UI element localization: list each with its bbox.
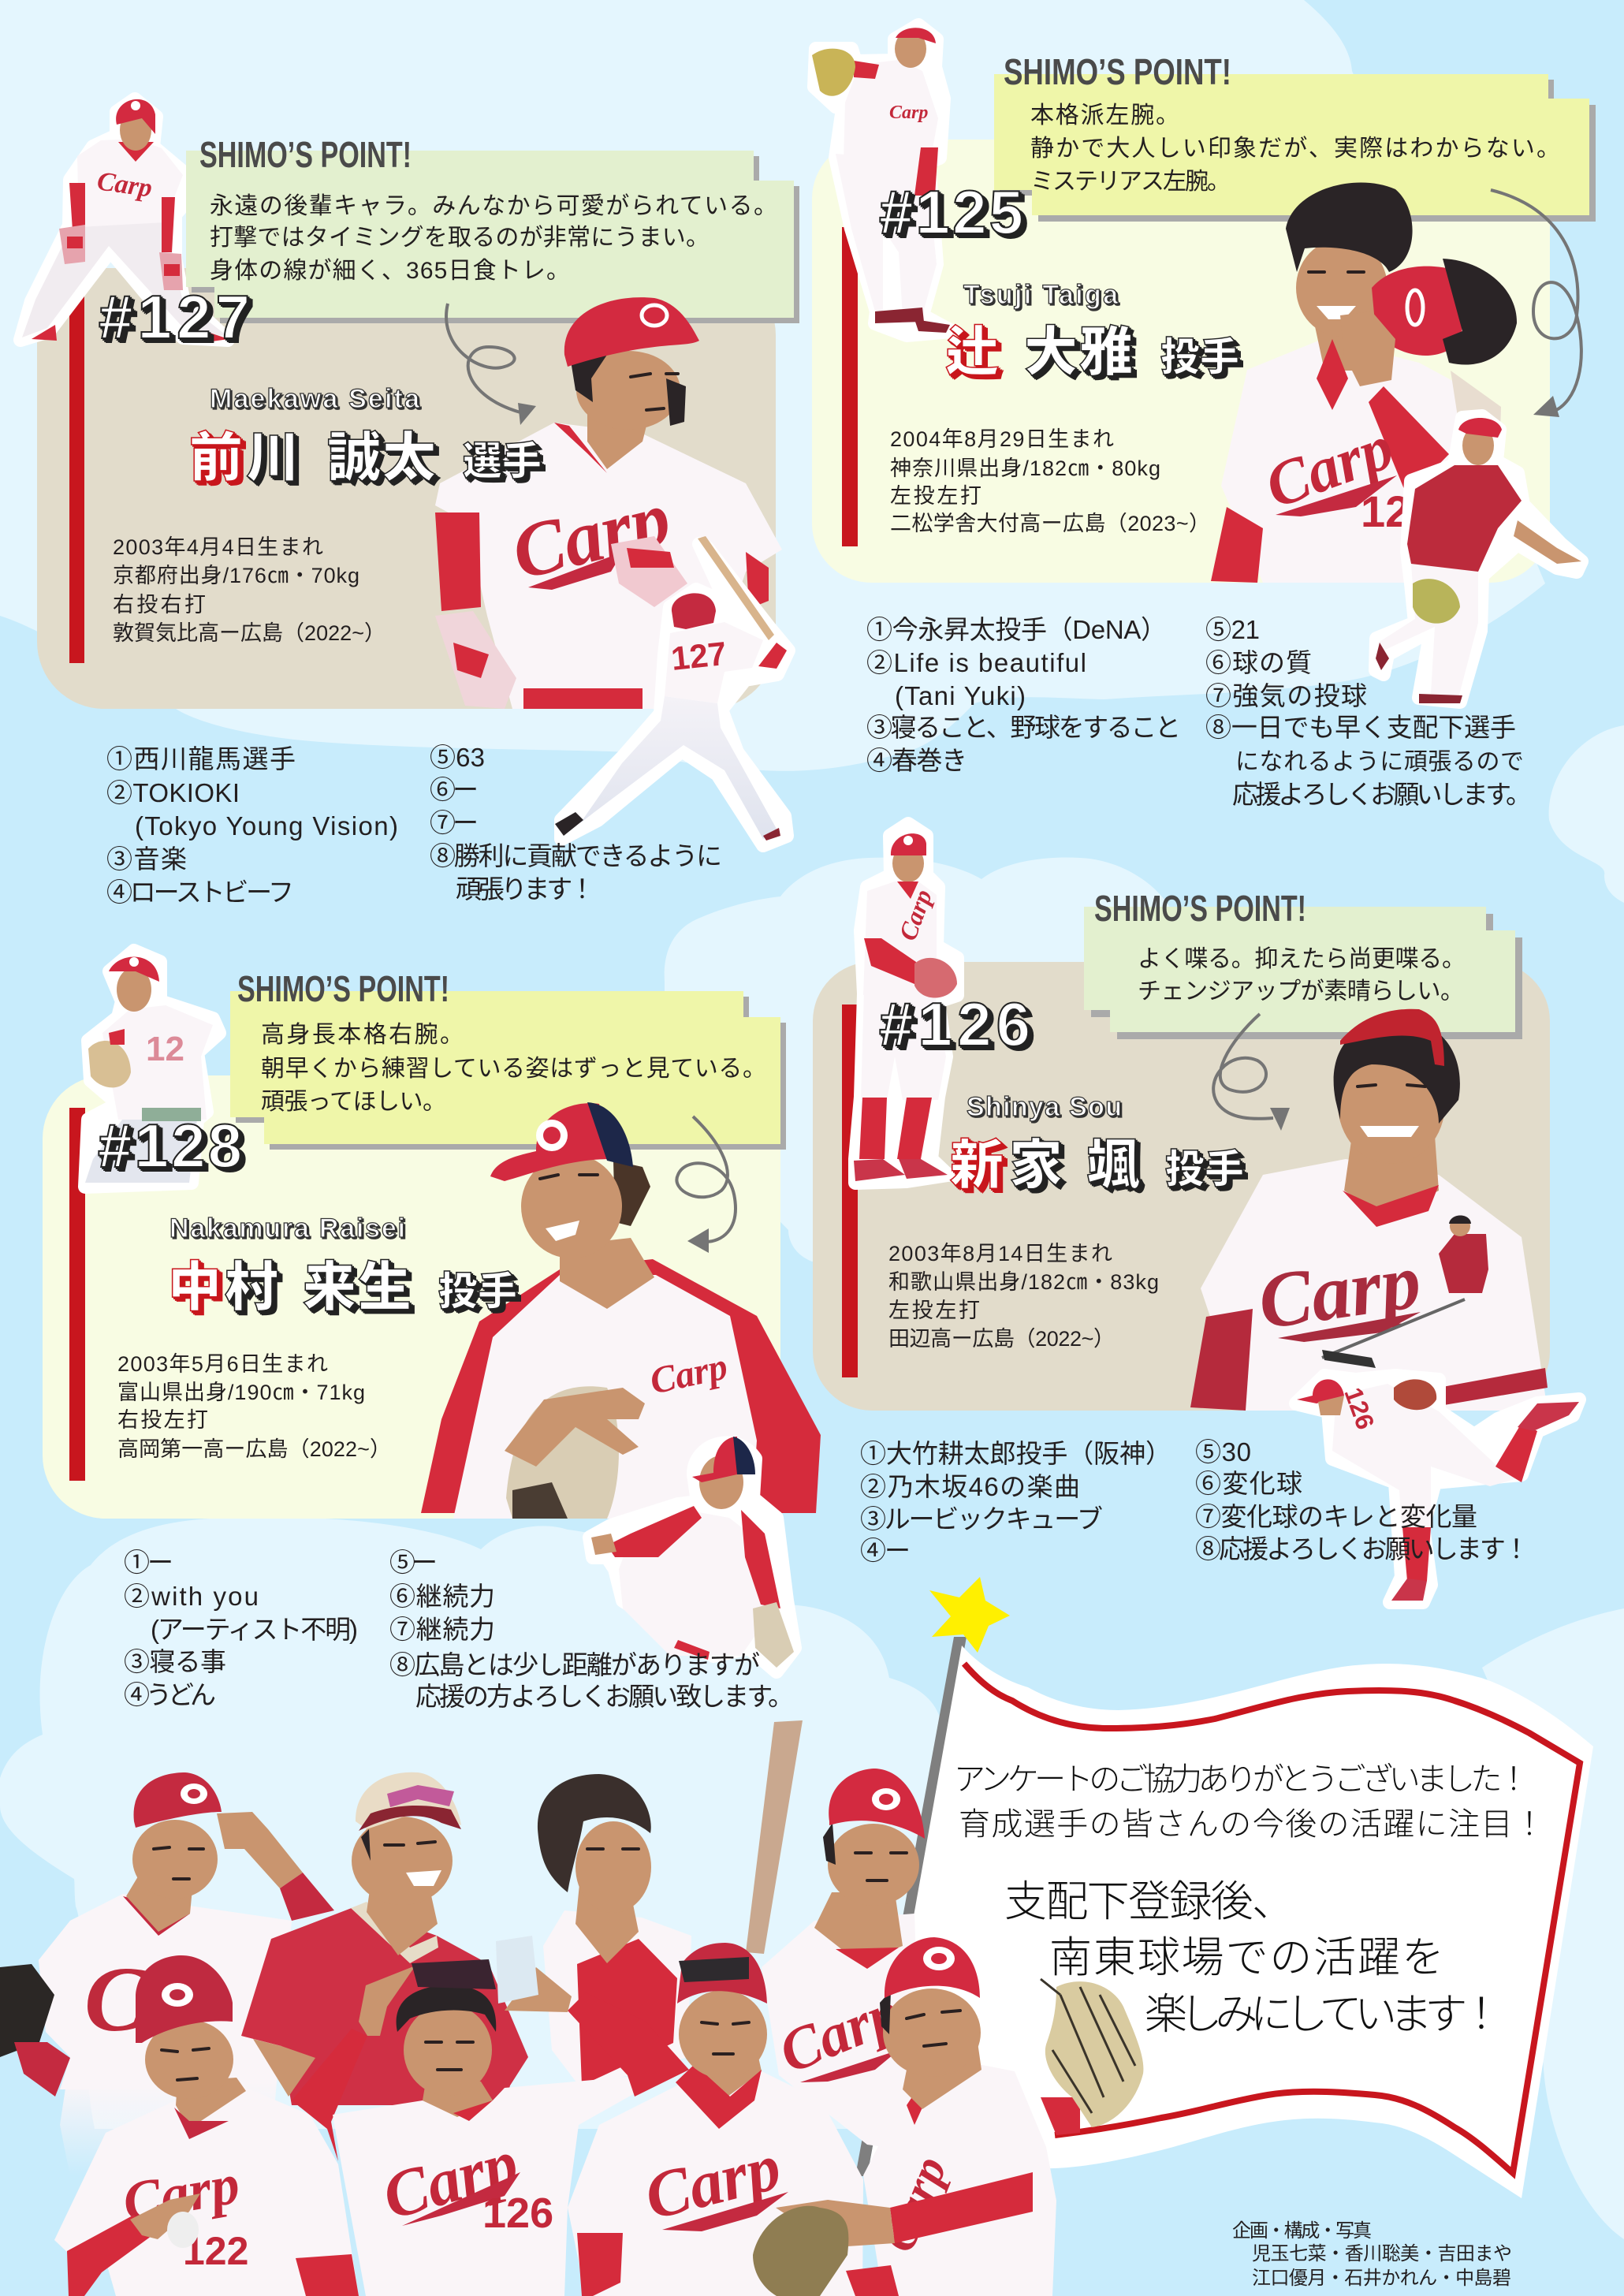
photo: pitching follow-through sticker (1296, 1376, 1579, 1602)
player back row 4 (762, 1769, 925, 2152)
romanized name: Tsuji Taiga (963, 280, 1119, 310)
player front row 3: Carp (638, 2130, 788, 2234)
profile card (812, 140, 1550, 583)
questionnaire answers left: ④春巻き (866, 746, 967, 775)
questionnaire answers right (1195, 1437, 1529, 1564)
note heading: SHIMO’S POINT! (1094, 888, 1306, 929)
questionnaire answers left: ②with you (124, 1582, 259, 1611)
questionnaire answers left: ④ローストビーフ (106, 878, 294, 907)
panel: player 128 Nakamura Raisei (43, 951, 821, 1711)
curly arrow (1213, 1014, 1290, 1131)
questionnaire answers left: ①ー (124, 1548, 173, 1577)
questionnaire answers right: ⑦強気の投球 (1205, 681, 1367, 710)
photo: pitching follow-through sticker: 126 (1339, 1384, 1380, 1433)
kanji name: 投手 (438, 1269, 517, 1314)
questionnaire answers left: (Tani Yuki) (895, 681, 1026, 710)
player back row 1: C (84, 1948, 147, 2051)
questionnaire answers right: ⑦継続力 (389, 1615, 495, 1644)
profile text: 二松学舎大付高ー広島（2023~） (890, 512, 1210, 535)
photo: large smiling portrait (1190, 1009, 1548, 1411)
flag message: 楽しみにしています！ (1145, 1991, 1503, 2038)
kanji name (168, 1258, 517, 1318)
photo: large portrait holding cap (1211, 182, 1517, 583)
questionnaire answers left: ③寝る事 (124, 1647, 226, 1676)
credits: 企画・構成・写真 (1232, 2220, 1372, 2242)
questionnaire answers left: (アーティスト不明) (151, 1615, 358, 1644)
questionnaire answers right: ⑤21 (1205, 615, 1260, 644)
kanji name: 新 (950, 1135, 1004, 1195)
profile text (117, 1352, 391, 1461)
red accent bar (842, 1004, 858, 1377)
photo: large portrait in helmet: Carp (504, 475, 679, 596)
profile text: 右投右打 (113, 593, 206, 617)
photo: full-body pitcher sticker: Carp (889, 102, 928, 123)
player back row 4: Carp (770, 1978, 909, 2086)
jersey number: #127 (99, 282, 250, 352)
questionnaire answers left: ④ー (860, 1536, 911, 1565)
questionnaire answers right: ⑧一日でも早く支配下選手 (1205, 713, 1516, 742)
panel: player 127 Maekawa Seita (20, 99, 799, 907)
romanized name: Shinya Sou (967, 1092, 1122, 1122)
note text: ミステリアス左腕。 (1030, 169, 1231, 195)
kanji name: 投手 (1165, 1147, 1244, 1191)
kanji name: 投手 (1160, 335, 1239, 379)
photo: groundskeeping small figure (1322, 1216, 1488, 1368)
questionnaire answers left (124, 1548, 358, 1709)
kanji name: 中 (168, 1258, 222, 1318)
romanized name: Nakamura Raisei (169, 1213, 405, 1243)
photo: running sticker in red shirt (1376, 416, 1581, 703)
red accent bar (69, 1108, 85, 1481)
questionnaire answers right: ⑥ー (430, 775, 479, 804)
profile card (43, 1075, 780, 1519)
questionnaire answers right: ⑧応援よろしくお願いします！ (1195, 1534, 1529, 1564)
profile text: 2003年8月14日生まれ (888, 1242, 1112, 1265)
kanji name: 前 (189, 428, 243, 488)
photo: large smiling portrait: Carp (1253, 1236, 1426, 1346)
questionnaire answers left: ④うどん (124, 1680, 216, 1709)
questionnaire answers right: ⑦変化球のキレと変化量 (1195, 1502, 1477, 1531)
kanji name (189, 428, 542, 488)
curly arrow (1491, 190, 1581, 417)
note text (1030, 102, 1560, 195)
photo: large portrait in helmet (435, 297, 782, 709)
player back row 2 in red shirt (241, 1772, 528, 2105)
note text (210, 193, 777, 284)
flag message: 支配下登録後、 (1004, 1878, 1294, 1925)
kanji name: 来生 (303, 1258, 412, 1318)
questionnaire answers left: ①今永昇太投手（DeNA） (866, 615, 1167, 644)
credits (1232, 2220, 1512, 2289)
player front row 2 with water bottle: 126 (482, 2190, 553, 2237)
profile card (37, 268, 776, 709)
note heading: SHIMO’S POINT! (199, 134, 412, 175)
questionnaire answers right: ⑥継続力 (389, 1582, 495, 1611)
jersey number: #128 (98, 1111, 242, 1180)
kanji name: 家 (1009, 1135, 1063, 1195)
player front row 1 (54, 1955, 359, 2296)
note text (1138, 946, 1466, 1004)
profile text: 左投左打 (890, 484, 981, 508)
questionnaire answers right: ⑤30 (1195, 1437, 1251, 1467)
questionnaire answers right: になれるように頑張るので (1235, 749, 1524, 775)
kanji name (945, 322, 1239, 382)
profile text: 右投左打 (117, 1408, 208, 1432)
questionnaire answers right (430, 743, 722, 904)
photo: throwing sticker: 12 (146, 1030, 184, 1068)
profile card (813, 962, 1550, 1411)
note text: 身体の線が細く、365日食トレ。 (210, 258, 570, 284)
note heading: SHIMO’S POINT! (237, 968, 449, 1009)
credits: 児玉七菜・香川聡美・吉田まや (1252, 2243, 1512, 2264)
questionnaire answers right: 頑張ります！ (456, 874, 595, 904)
questionnaire answers left (106, 744, 398, 907)
photo: throwing sticker (85, 951, 219, 1187)
questionnaire answers left: ③寝ること、野球をすること (866, 713, 1181, 742)
icon: baseball glove (1041, 1979, 1143, 2135)
player front row 3 (568, 1943, 863, 2296)
photo: large portrait holding cap: 125 (1361, 486, 1434, 536)
flag message (954, 1762, 1545, 2038)
profile text: 神奈川県出身/182㎝・80kg (890, 457, 1160, 480)
player front row 4 with glove (753, 1937, 1056, 2296)
panel: player 126 Shinya Sou (813, 824, 1579, 1602)
red accent bar (842, 227, 858, 546)
questionnaire answers left: ③音楽 (106, 844, 187, 874)
photo: large smiling portrait (421, 1102, 821, 1519)
photo: running sticker (590, 1437, 795, 1672)
profile text: 高岡第一高ー広島（2022~） (117, 1437, 391, 1461)
panel: player 125 Tsuji Taiga (812, 25, 1596, 809)
note text: 朝早くから練習している姿はずっと見ている。 (261, 1056, 766, 1082)
photo: full-body leading off: Carp (95, 166, 154, 203)
note text: よく喋る。抑えたら尚更喋る。 (1138, 946, 1466, 972)
icon: yellow star (929, 1577, 1010, 1653)
photo: large smiling portrait: Carp (646, 1345, 731, 1403)
questionnaire answers right: ⑤ー (389, 1548, 438, 1577)
flag message: 育成選手の皆さんの今後の活躍に注目！ (959, 1807, 1545, 1842)
flag body (868, 1646, 1593, 2198)
note heading: SHIMO’S POINT! (1004, 51, 1231, 92)
profile text: 2003年5月6日生まれ (117, 1352, 328, 1376)
kanji name: 辻 (945, 322, 999, 382)
jersey number: #126 (879, 990, 1030, 1059)
curly arrow (446, 304, 536, 425)
questionnaire answers left: (Tokyo Young Vision) (135, 811, 398, 840)
shimo's point note (186, 134, 799, 323)
note text: 本格派左腕。 (1030, 102, 1179, 129)
note text: チェンジアップが素晴らしい。 (1138, 978, 1464, 1004)
note text (261, 1022, 766, 1115)
photo: full-body pitcher sticker (812, 25, 952, 335)
flag red border (964, 1664, 1580, 2173)
shimo's point note (230, 968, 786, 1150)
player front row 2 with water bottle (292, 1936, 689, 2296)
player front row 1: Carp (118, 2152, 244, 2234)
player back row 1 (0, 1772, 334, 2176)
credits: 江口優月・石井かれん・中島碧 (1252, 2268, 1511, 2289)
note text: 頑張ってほしい。 (261, 1089, 446, 1115)
questionnaire answers left: ③ルービックキューブ (860, 1504, 1103, 1534)
shimo's point note (994, 51, 1596, 222)
kanji name: 誠太 (327, 428, 436, 488)
profile text: 2003年4月4日生まれ (113, 535, 323, 559)
curly arrow (676, 1116, 736, 1253)
photo: large portrait holding cap: Carp (1257, 412, 1402, 522)
player front row 2 with water bottle: Carp (375, 2126, 526, 2234)
flag message: アンケートのご協力ありがとうございました！ (954, 1762, 1529, 1797)
questionnaire answers right (389, 1548, 794, 1711)
questionnaire answers left (866, 615, 1181, 775)
wooden bat (746, 1720, 803, 1954)
questionnaire answers right: 応援よろしくお願いします。 (1232, 780, 1532, 809)
photo: batter sticker (555, 536, 788, 845)
questionnaire answers right: ⑥球の質 (1205, 648, 1312, 677)
profile text: 和歌山県出身/182㎝・83kg (888, 1270, 1159, 1294)
photo: full-body standing sticker: Carp (893, 885, 937, 944)
player front row 4 with glove: Carp (872, 2149, 956, 2259)
red accent bar (69, 290, 84, 663)
questionnaire answers left: ②Life is beautiful (866, 648, 1086, 677)
questionnaire answers left (860, 1439, 1171, 1565)
questionnaire answers left: ①大竹耕太郎投手（阪神） (860, 1439, 1171, 1468)
kanji name: 大雅 (1024, 322, 1133, 382)
romanized name: Maekawa Seita (210, 384, 420, 414)
kanji name (950, 1135, 1244, 1195)
photo: full-body standing sticker (854, 824, 957, 1183)
kanji name: 選手 (463, 439, 542, 483)
questionnaire answers right: ⑧広島とは少し距離がありますが (389, 1650, 760, 1679)
note text: 高身長本格右腕。 (261, 1022, 464, 1048)
note text: 打撃ではタイミングを取るのが非常にうまい。 (210, 225, 710, 251)
profile text: 左投左打 (888, 1299, 980, 1322)
profile text: 京都府出身/176㎝・70kg (113, 564, 359, 587)
questionnaire answers right: ⑤63 (430, 743, 485, 772)
jersey number: #125 (879, 177, 1023, 247)
photo: batter sticker: 127 (669, 635, 728, 677)
questionnaire answers right: ⑧勝利に貢献できるように (430, 841, 722, 870)
kanji name: 川 (246, 428, 300, 488)
profile text (113, 535, 386, 645)
profile text: 2004年8月29日生まれ (890, 427, 1114, 451)
player front row 1: 122 (183, 2229, 248, 2273)
questionnaire answers right (1205, 615, 1532, 809)
profile text: 富山県出身/190㎝・71kg (117, 1381, 365, 1404)
questionnaire answers right: 応援の方よろしくお願い致します。 (415, 1682, 794, 1711)
kanji name: 颯 (1086, 1135, 1140, 1195)
questionnaire answers left: ②TOKIOKI (106, 778, 240, 807)
flag with closing message (855, 1577, 1593, 2198)
profile text: 敦賀気比高ー広島（2022~） (113, 621, 386, 645)
profile text (890, 427, 1210, 535)
questionnaire answers left: ①西川龍馬選手 (106, 744, 296, 773)
note text: 永遠の後輩キャラ。みんなから可愛がられている。 (210, 193, 777, 219)
questionnaire answers left: ②乃木坂46の楽曲 (860, 1472, 1080, 1501)
photo: full-body leading off (20, 99, 229, 342)
group photo of eight players (0, 1720, 1056, 2296)
shimo's point note (1084, 888, 1522, 1039)
kanji name: 村 (225, 1258, 278, 1318)
profile text (888, 1242, 1159, 1351)
player back row 3 (538, 1774, 691, 2089)
profile text: 田辺高ー広島（2022~） (888, 1327, 1115, 1351)
flag pole (855, 1637, 967, 2176)
flag message: 南東球場での活躍を (1049, 1934, 1444, 1981)
questionnaire answers right: ⑥変化球 (1195, 1469, 1302, 1498)
note text: 静かで大人しい印象だが、実際はわからない。 (1030, 136, 1560, 162)
questionnaire answers right: ⑦ー (430, 808, 479, 837)
